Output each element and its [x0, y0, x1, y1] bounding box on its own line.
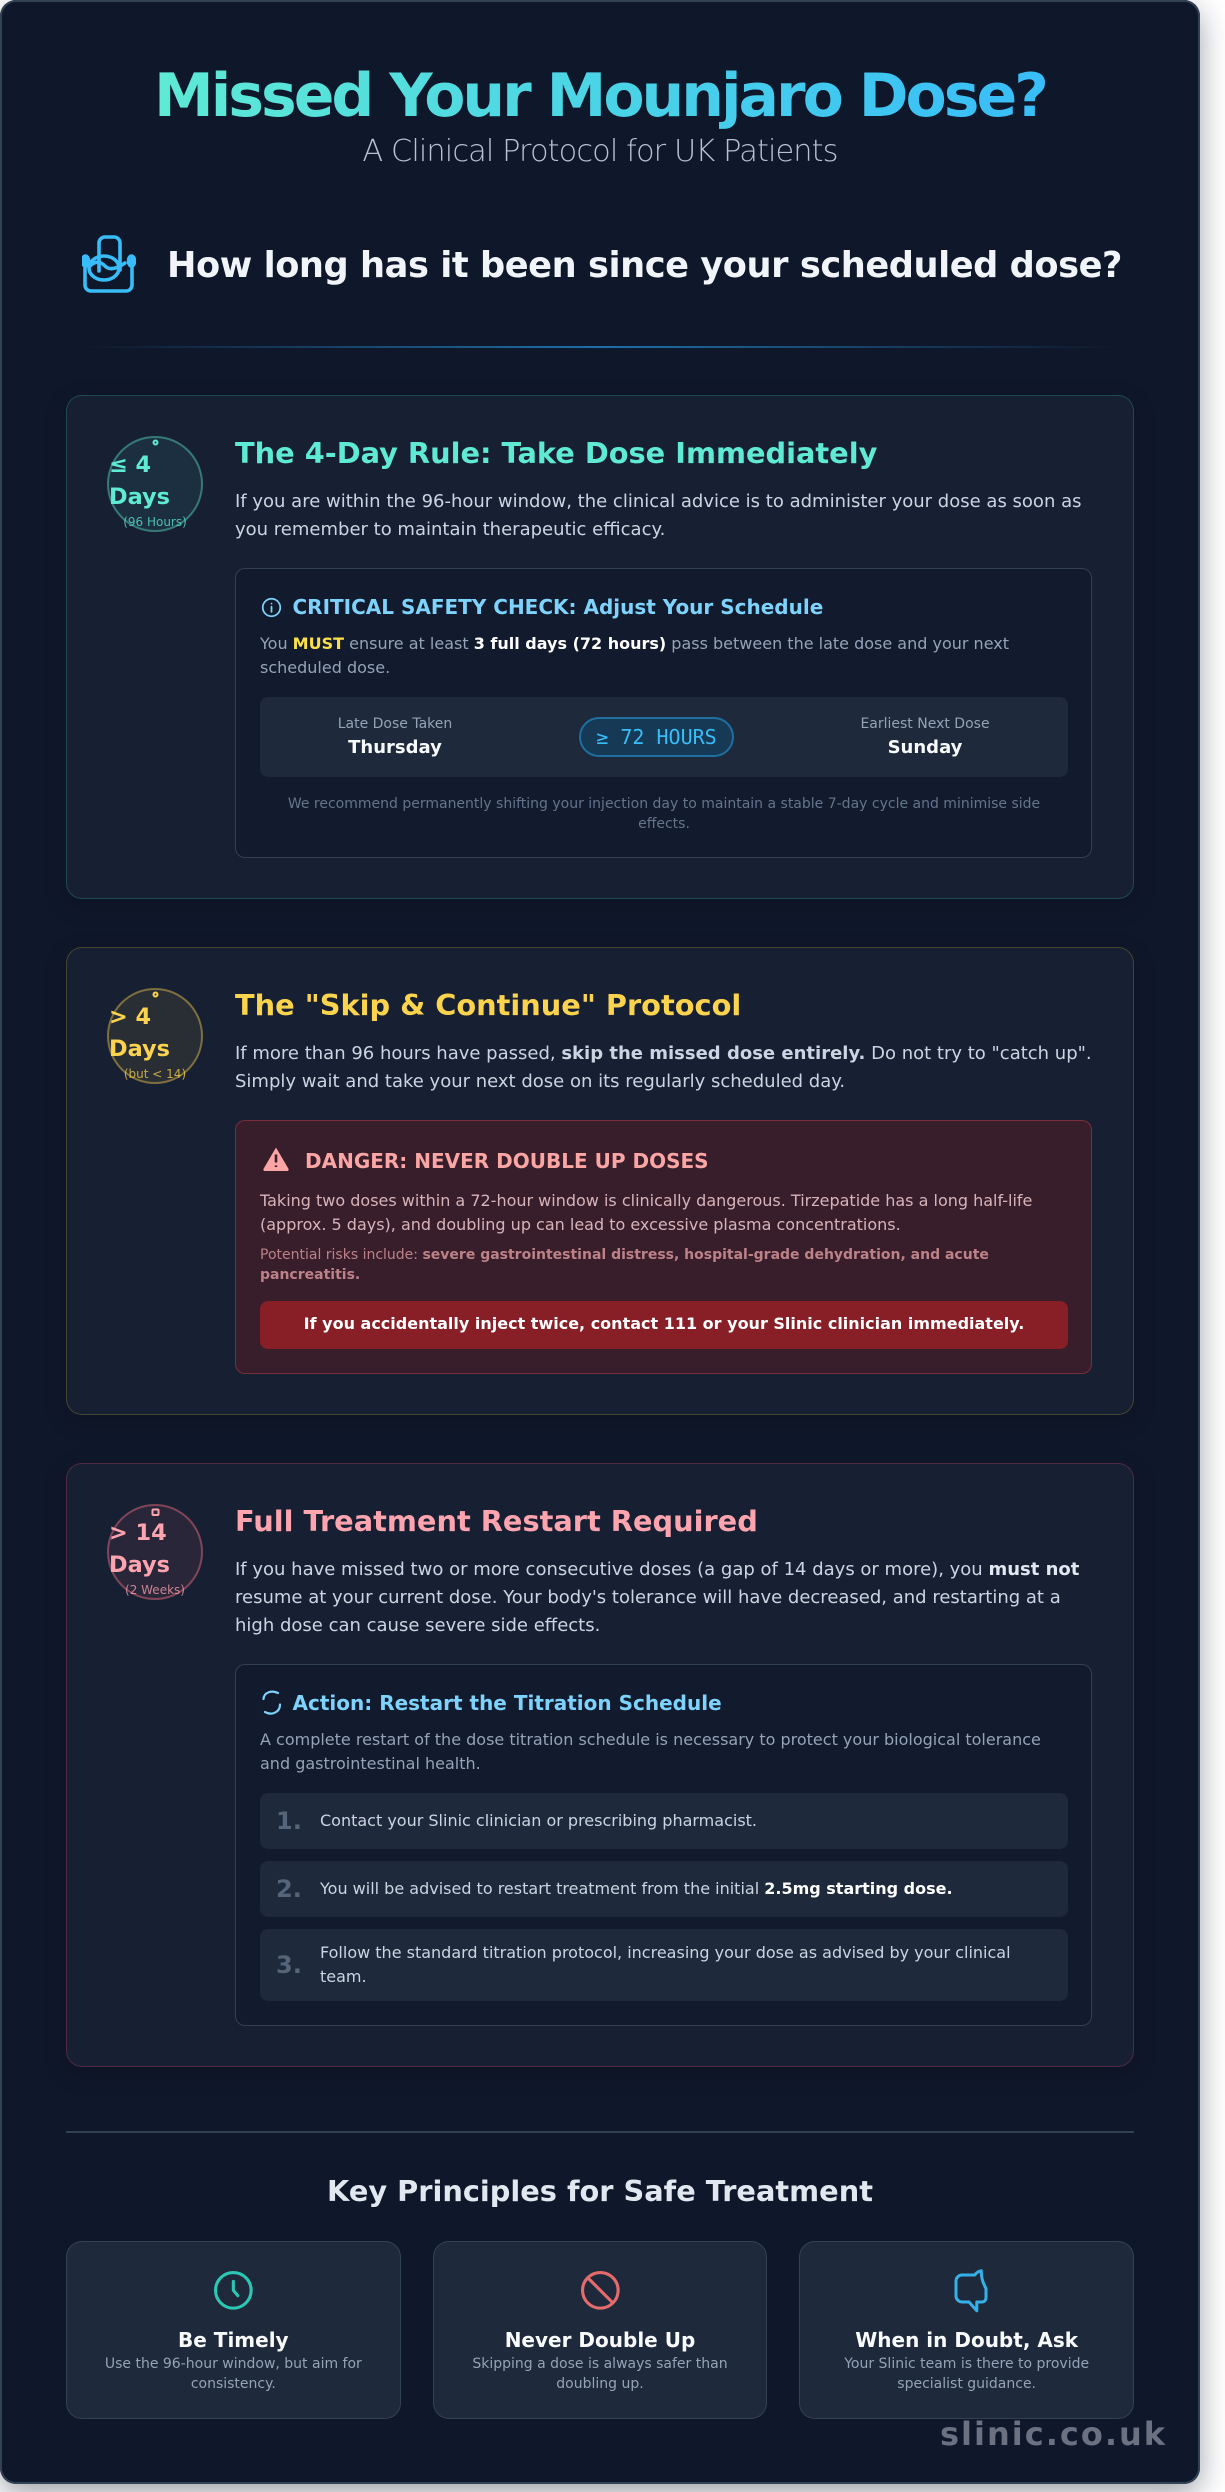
- principle text: Your Slinic team is there to provide: [844, 2356, 1089, 2372]
- badge: up to 4 days: [107, 436, 203, 532]
- callout text: and gastrointestinal health.: [260, 1754, 481, 1773]
- question heading: How long has it been since your scheduled dose?: [167, 245, 1122, 286]
- callout text: [260, 1730, 1041, 1773]
- panel: 4-day rule: [66, 395, 1134, 899]
- subtitle: A Clinical Protocol for UK Patients: [362, 134, 838, 169]
- principle text: [105, 2356, 362, 2392]
- principle title: Be Timely: [178, 2328, 289, 2352]
- icon: refresh: [262, 1690, 282, 1715]
- icon: clock: [214, 2271, 253, 2310]
- description: Simply wait and take your next dose on its regularly scheduled day.: [235, 1070, 845, 1092]
- icon: small clock: [152, 992, 158, 998]
- badge note: (96 Hours): [123, 515, 187, 529]
- icon: dose bag: [82, 235, 136, 293]
- danger text: (approx. 5 days), and doubling up can lead to excessive plasma concentrations.: [260, 1215, 901, 1234]
- description: If more than 96 hours have passed, skip the missed dose entirely. Do not try to "catch up".: [235, 1042, 1092, 1064]
- interval pill: ≥ 72 HOURS: [596, 725, 717, 749]
- principle text: doubling up.: [556, 2376, 644, 2392]
- badge: over 14 days: [107, 1504, 203, 1600]
- callout text: [260, 634, 1009, 677]
- late dose: Late Dose Taken: [338, 716, 452, 732]
- recommendation note: effects.: [638, 816, 690, 832]
- heading: Full Treatment Restart Required: [235, 1504, 758, 1538]
- timeline strip: [260, 697, 1068, 777]
- badge value: ≤ 4: [109, 452, 151, 478]
- callout text: scheduled dose.: [260, 658, 390, 677]
- description: [235, 491, 1081, 540]
- icon: speech bubble: [954, 2269, 988, 2312]
- key principles heading: Key Principles for Safe Treatment: [327, 2174, 873, 2208]
- badge note: (but < 14): [124, 1067, 186, 1081]
- danger text: Taking two doses within a 72-hour window is clinically dangerous. Tirzepatide has a long half-life: [260, 1191, 1032, 1210]
- callout: critical safety check: [235, 568, 1092, 858]
- panel: full restart: [66, 1463, 1134, 2067]
- step 1: Contact your Slinic clinician or prescribing pharmacist.: [320, 1811, 757, 1830]
- step 2: [260, 1861, 1068, 1917]
- risks: Potential risks include: severe gastrointestinal distress, hospital-grade dehydration, and acute: [260, 1247, 989, 1263]
- late dose: [338, 716, 452, 758]
- risks: [260, 1247, 989, 1283]
- badge value: [109, 1004, 170, 1062]
- principle: be timely: [66, 2241, 401, 2419]
- risks: pancreatitis.: [260, 1267, 360, 1283]
- icon: prohibited: [581, 2271, 620, 2310]
- badge value: > 14: [109, 1520, 167, 1546]
- badge value: [109, 452, 170, 510]
- principle title: When in Doubt, Ask: [855, 2328, 1078, 2352]
- recommendation note: [288, 796, 1040, 832]
- principle title: Never Double Up: [505, 2328, 695, 2352]
- badge value: Days: [109, 484, 170, 510]
- callout text: You MUST ensure at least 3 full days (72 hours) pass between the late dose and your next: [260, 634, 1009, 653]
- danger heading: DANGER: NEVER DOUBLE UP DOSES: [305, 1149, 709, 1173]
- callout heading: CRITICAL SAFETY CHECK: Adjust Your Schedule: [292, 595, 823, 619]
- heading: The "Skip & Continue" Protocol: [235, 988, 741, 1022]
- badge: over 4 days: [107, 988, 203, 1084]
- callout heading: Action: Restart the Titration Schedule: [292, 1691, 722, 1715]
- next dose: Earliest Next Dose: [860, 716, 990, 732]
- principle text: Skipping a dose is always safer than: [472, 2356, 728, 2372]
- callout: restart action: [235, 1664, 1092, 2026]
- divider: [80, 346, 1120, 348]
- title: Missed Your Mounjaro Dose?: [154, 61, 1046, 131]
- description: you remember to maintain therapeutic efficacy.: [235, 519, 665, 540]
- icon: small calendar: [152, 1508, 160, 1516]
- section rule: [66, 2131, 1134, 2133]
- step 3: Follow the standard titration protocol, increasing your dose as advised by your clinical: [320, 1943, 1011, 1962]
- interval pill: [579, 717, 734, 757]
- principle text: consistency.: [191, 2376, 276, 2392]
- badge value: > 4: [109, 1004, 151, 1030]
- badge value: Days: [109, 1036, 170, 1062]
- principle text: specialist guidance.: [897, 2376, 1036, 2392]
- description: If you have missed two or more consecutive doses (a gap of 14 days or more), you must not: [235, 1558, 1079, 1580]
- step 3: team.: [320, 1967, 367, 1986]
- step 2: 2.: [276, 1875, 302, 1903]
- description: If you are within the 96-hour window, the clinical advice is to administer your dose as soon as: [235, 491, 1081, 512]
- description: [235, 1558, 1079, 1636]
- principle: never double up: [433, 2241, 767, 2419]
- watermark: slinic.co.uk: [940, 2415, 1167, 2453]
- description: resume at your current dose. Your body's tolerance will have decreased, and restarting at a: [235, 1586, 1061, 1608]
- step 3: [260, 1929, 1068, 2001]
- description: high dose can cause severe side effects.: [235, 1614, 600, 1636]
- description: [235, 1042, 1092, 1092]
- icon: small clock: [152, 440, 158, 446]
- badge note: (2 Weeks): [125, 1583, 185, 1597]
- callout text: A complete restart of the dose titration schedule is necessary to protect your biological tolerance: [260, 1730, 1041, 1749]
- badge value: Days: [109, 1552, 170, 1578]
- panel: skip and continue: [66, 947, 1134, 1415]
- next dose: [860, 716, 990, 758]
- principle text: [844, 2356, 1089, 2392]
- badge value: [109, 1520, 170, 1578]
- next dose: Sunday: [888, 737, 962, 758]
- danger text: [260, 1191, 1032, 1234]
- icon: warning triangle: [263, 1148, 289, 1171]
- step 3: 3.: [276, 1951, 302, 1979]
- principle text: Use the 96-hour window, but aim for: [105, 2356, 362, 2372]
- heading: The 4-Day Rule: Take Dose Immediately: [235, 436, 877, 470]
- principle: ask: [799, 2241, 1134, 2419]
- icon: info: [262, 598, 282, 618]
- step 1: [260, 1793, 1068, 1849]
- recommendation note: We recommend permanently shifting your injection day to maintain a stable 7-day cycle and minimise side: [288, 796, 1040, 812]
- step 1: 1.: [276, 1807, 302, 1835]
- emergency banner: If you accidentally inject twice, contact 111 or your Slinic clinician immediately.: [304, 1314, 1024, 1333]
- emergency banner: [260, 1301, 1068, 1349]
- step 2: You will be advised to restart treatment from the initial 2.5mg starting dose.: [320, 1879, 953, 1898]
- late dose: Thursday: [348, 737, 442, 758]
- principle text: [472, 2356, 728, 2392]
- callout: danger: [235, 1120, 1092, 1374]
